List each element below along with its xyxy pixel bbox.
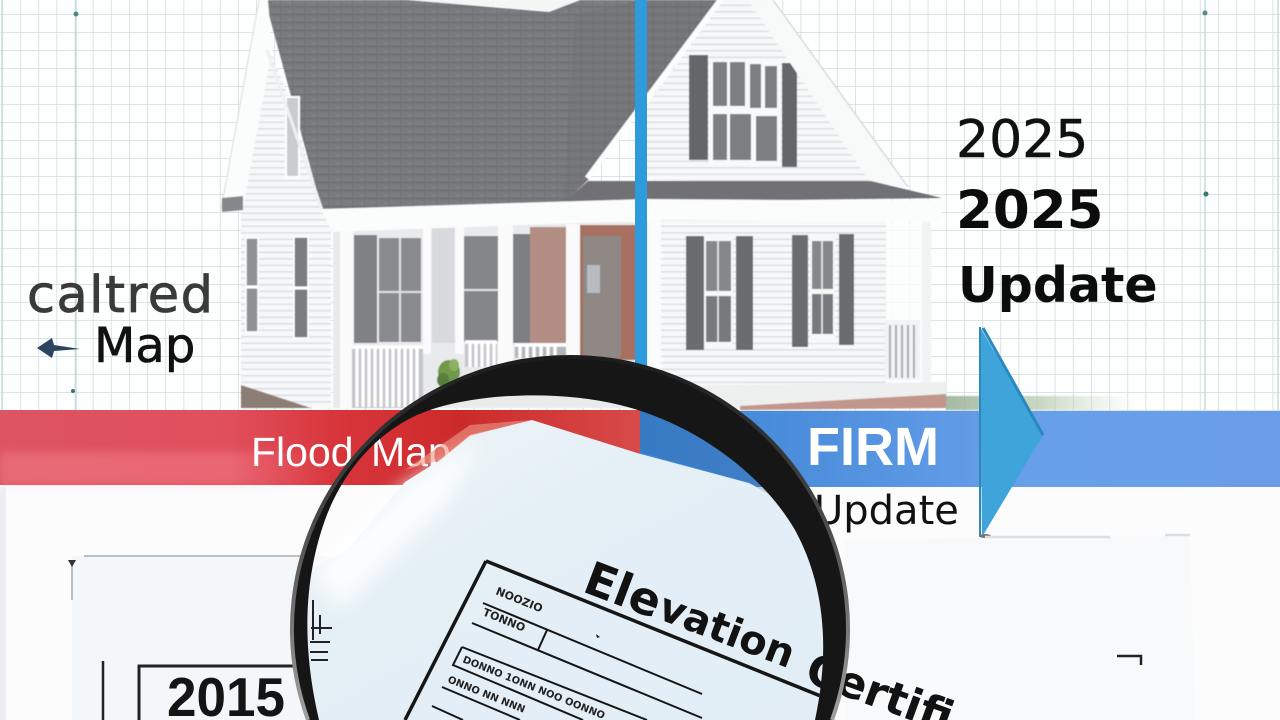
ribbon label: Flood Map: Flood: [251, 429, 354, 475]
map text fragments at lens edge: [310, 600, 332, 660]
form small text: TONNO: [481, 606, 527, 634]
heading: Elevation Certificate: Ele: [577, 551, 670, 629]
form small text: [446, 585, 606, 720]
right paper: [845, 535, 1195, 720]
house roof: [265, 0, 720, 210]
lens rim highlight: [292, 357, 848, 720]
label: Update: Update: [814, 488, 959, 534]
caltred text: caltred: [27, 266, 215, 325]
porch railings: [352, 342, 566, 408]
blue divider line: [635, 0, 647, 372]
ribbon label: Flood Map: [251, 429, 451, 475]
background grid: [0, 0, 1280, 412]
right side porch: [885, 212, 931, 387]
label: 2025 2025 Update: [956, 110, 1158, 314]
front gable with dormer window: [587, 0, 908, 187]
2025 bold: 2025: [956, 180, 1104, 241]
left arrow: [37, 338, 80, 358]
heading: Elevation Certificate: vation: [652, 584, 801, 678]
porch windows and shutters: [354, 225, 636, 360]
ribbon label: Flood Map: Map: [371, 429, 451, 475]
blue ribbon: FIRM: [640, 411, 1280, 487]
shrub: [437, 359, 460, 387]
foundation: [660, 382, 946, 408]
red ribbon: Flood Map: [0, 410, 640, 485]
lower roof band: [563, 181, 942, 203]
left gable wall: [221, 0, 331, 408]
blue arrow flag: [979, 327, 1043, 538]
label: caltred Map: [27, 266, 215, 374]
Map text: Map: [94, 318, 195, 374]
right wall windows: [686, 234, 854, 350]
form outline: [404, 559, 820, 720]
left map paper: [0, 487, 332, 720]
magnifying glass: [292, 357, 960, 720]
heading: Elevation Certificate: [577, 551, 960, 720]
porch columns: [340, 214, 661, 408]
glass contents: elevation certificate: [308, 411, 823, 720]
2025 regular: 2025: [956, 110, 1088, 170]
form small text: DONNO 1ONN NOO OONNO: [461, 655, 606, 720]
lower page background: [0, 485, 1280, 720]
house illustration: [221, 0, 1136, 410]
eave beam: [321, 199, 945, 232]
form small text: NOOZIO: [494, 585, 544, 615]
ribbon label: FIRM: FIRM: [807, 417, 939, 477]
form small text: ONNO NN NNN: [446, 675, 527, 716]
lens ring: [292, 357, 848, 720]
Update bold: Update: [958, 257, 1158, 314]
porch and walls: [321, 199, 1136, 410]
